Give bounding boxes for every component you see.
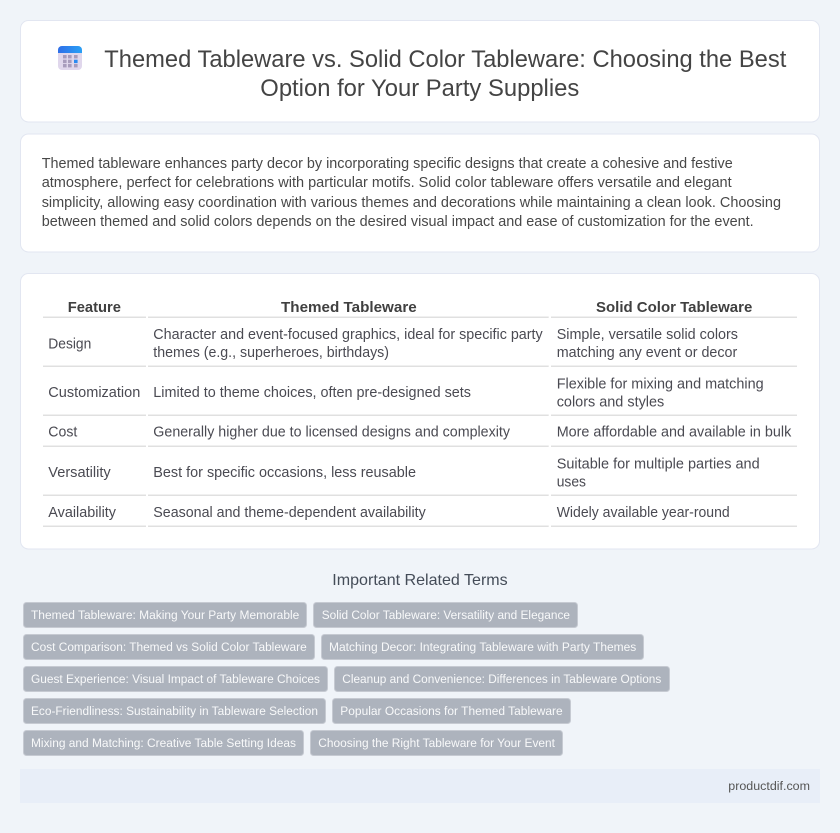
panel: introduction text: between themed and solid colors depends on the desired visual impact and ease of customization for the event. [42,214,754,230]
panel: introduction text [20,134,820,252]
panel: title header [20,20,820,122]
table row: versatility: Suitable for multiple parties and [557,456,760,472]
table row: cost: Generally higher due to licensed designs and complexity [153,425,511,441]
tag row 3: Cleanup and Convenience: Differences in Tableware Options [342,672,661,686]
table row: customization: Flexible for mixing and matching [557,376,764,392]
table header row: Feature [68,300,121,316]
table row: availability: Seasonal and theme-dependent availability [153,505,426,521]
table header row [43,300,797,317]
table row: customization: Limited to theme choices, often pre-designed sets [153,385,471,401]
table header row: Themed Tableware [281,300,417,316]
panel: related term tags [24,602,670,756]
panel: introduction text: simplicity, allowing easy coordination with various themes and decorations while maintaining a clean look. Choosing [42,195,781,211]
table row: availability: Availability [48,505,117,521]
tag row 3: Guest Experience: Visual Impact of Tableware Choices [31,672,320,686]
tag row 2: Cost Comparison: Themed vs Solid Color Tableware [31,640,307,654]
panel: introduction text: Themed tableware enhances party decor by incorporating specific designs that create a cohesive and festive [42,156,733,172]
table header row: Solid Color Tableware [596,300,752,316]
panel: comparison table [20,274,820,549]
tag row 2: Matching Decor: Integrating Tableware with Party Themes [329,640,636,654]
footer: productdif.com [728,779,810,793]
table row: versatility: Versatility [48,465,111,481]
tag row 4: Eco-Friendliness: Sustainability in Tableware Selection [31,704,318,718]
table row: availability [43,505,797,526]
title [104,46,786,102]
table row: design: themes (e.g., superheroes, birthdays) [153,345,389,361]
table row: design [43,327,797,366]
table row: versatility [43,456,797,495]
tag row 1: Themed Tableware: Making Your Party Memorable [31,608,299,622]
tag row 4 [24,698,570,724]
table row: customization [43,376,797,415]
table row: design: Simple, versatile solid colors [557,327,738,343]
title: Option for Your Party Supplies [260,75,579,102]
table row: cost: More affordable and available in bulk [557,425,792,441]
table row: cost: Cost [48,425,77,441]
tag row 2 [24,634,644,660]
tag row 1: Solid Color Tableware: Versatility and Elegance [322,608,570,622]
table row: design: Character and event-focused graphics, ideal for specific party [153,327,543,343]
table row: customization: colors and styles [557,394,664,410]
tag row 3 [24,666,670,692]
table row: cost [43,425,797,446]
table row: design: matching any event or decor [557,345,737,361]
tag row 5 [24,730,562,756]
tag row 1 [24,602,578,628]
tag row 5: Choosing the Right Tableware for Your Event [318,736,556,750]
icon: calendar tableware [58,46,82,70]
table row: design: Design [48,336,91,352]
tag row 5: Mixing and Matching: Creative Table Setting Ideas [31,736,296,750]
tag row 4: Popular Occasions for Themed Tableware [340,704,563,718]
heading: important related terms: Important Related Terms [332,572,508,589]
table row: versatility: uses [557,474,586,490]
footer [20,769,820,803]
table row: customization: Customization [48,385,140,401]
table row: versatility: Best for specific occasions, less reusable [153,465,416,481]
panel: introduction text: atmosphere, perfect for celebrations with particular motifs. Solid color tableware offers versatile and elegant [42,175,732,191]
title: Themed Tableware vs. Solid Color Tableware: Choosing the Best [104,46,786,73]
table row: availability: Widely available year-round [557,505,730,521]
